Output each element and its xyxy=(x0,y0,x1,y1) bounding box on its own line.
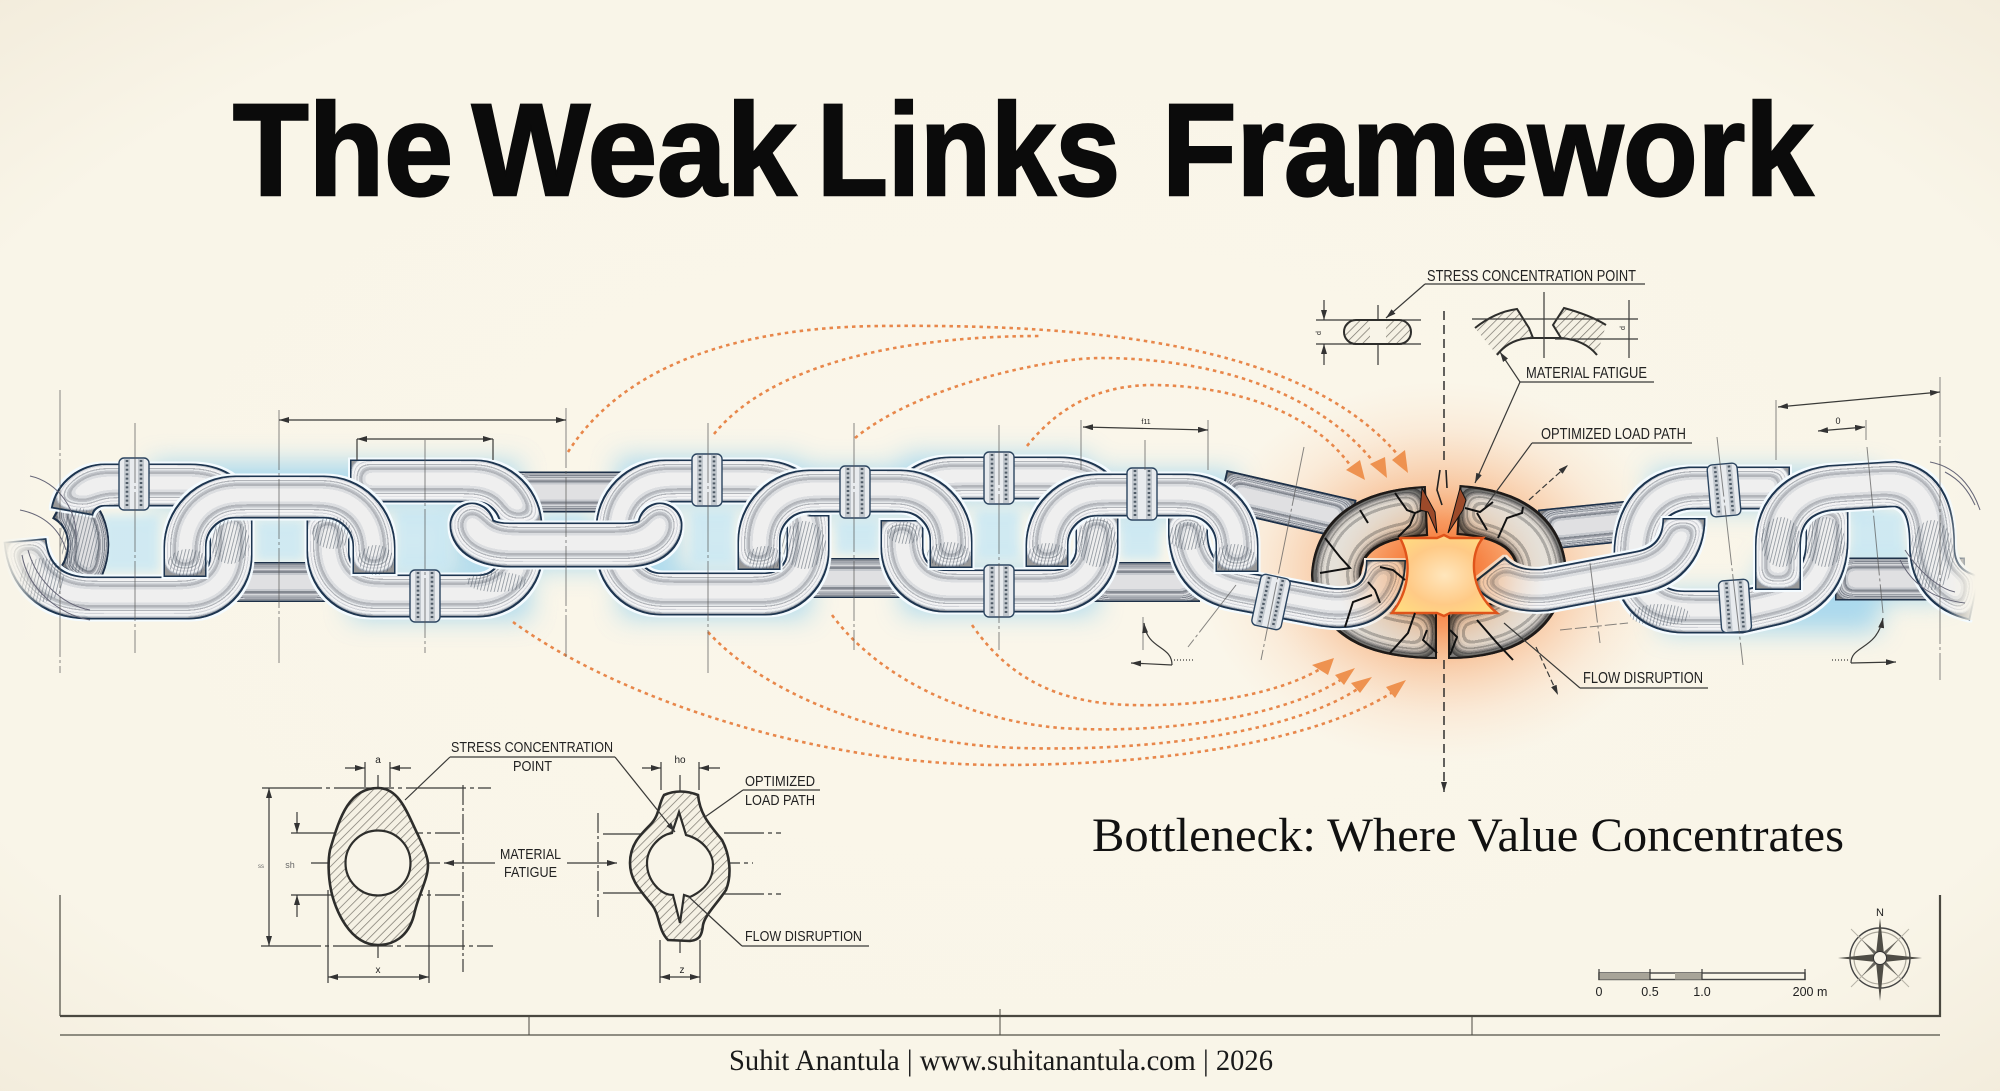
cross-section drawing right xyxy=(598,755,781,983)
label: optimized load path lower xyxy=(705,773,820,817)
cross-section drawing left: sh xyxy=(285,860,295,870)
dimension arrows xyxy=(279,392,1940,460)
link 8 xyxy=(1047,495,1237,572)
title: Framework xyxy=(1162,76,1813,223)
subtitle: Bottleneck: Where Value Concentrates xyxy=(1092,809,1844,862)
label: material fatigue lower: FATIGUE xyxy=(504,864,557,881)
fade at the left chain end xyxy=(0,450,46,640)
link 6 xyxy=(759,491,951,570)
glowing gap in the broken link xyxy=(1392,535,1497,616)
label: stress concentration point: STRESS CONCENTRATION xyxy=(451,739,613,756)
cross-section drawing right: z xyxy=(680,965,684,976)
broken link: left half xyxy=(1336,511,1437,634)
sketch strokes at chain ends xyxy=(20,462,1980,620)
footer credit: Suhit Anantula | www.suhitanantula.com | 2026 xyxy=(729,1044,1273,1077)
label: material fatigue: MATERIAL FATIGUE xyxy=(1526,365,1647,382)
chain xyxy=(20,452,1975,634)
scale bar xyxy=(1596,969,1827,999)
label: material fatigue lower xyxy=(444,846,617,881)
collars xyxy=(119,452,1752,633)
cross-section drawing left xyxy=(258,755,493,983)
link 5 xyxy=(617,481,808,594)
title xyxy=(233,76,1813,223)
label: flow disruption lower xyxy=(689,897,869,946)
title: Links xyxy=(817,76,1120,223)
scale bar: 200 m xyxy=(1793,985,1827,999)
section detail: fractured arc xyxy=(1472,292,1638,358)
scale bar: 0.5 xyxy=(1641,985,1659,999)
orange dotted flow arcs top xyxy=(568,326,1398,465)
cross-section drawing left: x xyxy=(376,965,380,976)
cracks in the broken link xyxy=(1320,470,1523,660)
blue glow behind chain xyxy=(150,478,1950,612)
dimension lines over the chain xyxy=(60,377,1940,680)
title: Weak xyxy=(472,76,796,223)
label: flow disruption: FLOW DISRUPTION xyxy=(1583,670,1703,687)
compass rose xyxy=(1838,907,1922,1001)
central dashed axis with arrow xyxy=(1443,311,1445,792)
orange dotted flow arcs bottom xyxy=(513,615,1396,765)
link 1 far left xyxy=(25,485,235,598)
scale bar: 0 xyxy=(1596,985,1603,999)
small curved load markers xyxy=(1131,618,1896,665)
blue hole fill xyxy=(100,510,1905,573)
link 11 front bar xyxy=(1488,518,1684,590)
label: optimized load path lower: LOAD PATH xyxy=(745,792,815,809)
link 12 xyxy=(1635,488,1827,612)
link 9 front bar xyxy=(1188,515,1386,608)
cross-section drawing left: a xyxy=(375,755,381,766)
section detail: stress concentration: d xyxy=(1316,331,1323,335)
label: stress concentration point xyxy=(405,739,675,832)
label: optimized load path: OPTIMIZED LOAD PATH xyxy=(1541,426,1686,443)
section detail: stress concentration: STRESS CONCENTRATION POINT xyxy=(1427,268,1636,285)
label: flow disruption lower: FLOW DISRUPTION xyxy=(745,928,862,945)
section detail: fractured arc: d xyxy=(1620,326,1627,330)
label: optimized load path xyxy=(1485,426,1692,507)
link 13 xyxy=(1778,484,1975,598)
label: optimized load path lower: OPTIMIZED xyxy=(745,773,815,790)
dimension arrows: f11 xyxy=(1141,419,1151,426)
link 3 xyxy=(328,481,522,596)
scale bar: 1.0 xyxy=(1693,985,1711,999)
section detail: stress concentration xyxy=(1316,268,1645,365)
orange arrowheads xyxy=(1312,450,1408,698)
cross-section drawing left: ss xyxy=(258,864,264,870)
title block frame xyxy=(60,895,1940,1035)
warm overlay on broken link xyxy=(1335,485,1545,665)
label: material fatigue xyxy=(1475,352,1654,483)
label: stress concentration point: POINT xyxy=(513,758,552,775)
label: material fatigue lower: MATERIAL xyxy=(500,846,561,863)
link 7 xyxy=(902,478,1103,591)
title: The xyxy=(233,76,453,223)
label: flow disruption xyxy=(1504,623,1708,695)
back bars of the chain xyxy=(225,490,1965,582)
compass rose: N xyxy=(1876,907,1884,919)
dimension arrows: 0 xyxy=(1835,416,1841,426)
broken link: right half xyxy=(1448,510,1542,634)
link 4 front bar xyxy=(472,525,660,545)
fade at the right chain end xyxy=(1946,450,2000,620)
orange glow around the break xyxy=(1200,382,1680,762)
hatch shading on tube bends xyxy=(20,508,1954,626)
cross-section drawing right: ho xyxy=(674,755,686,766)
link 2 xyxy=(185,497,374,577)
